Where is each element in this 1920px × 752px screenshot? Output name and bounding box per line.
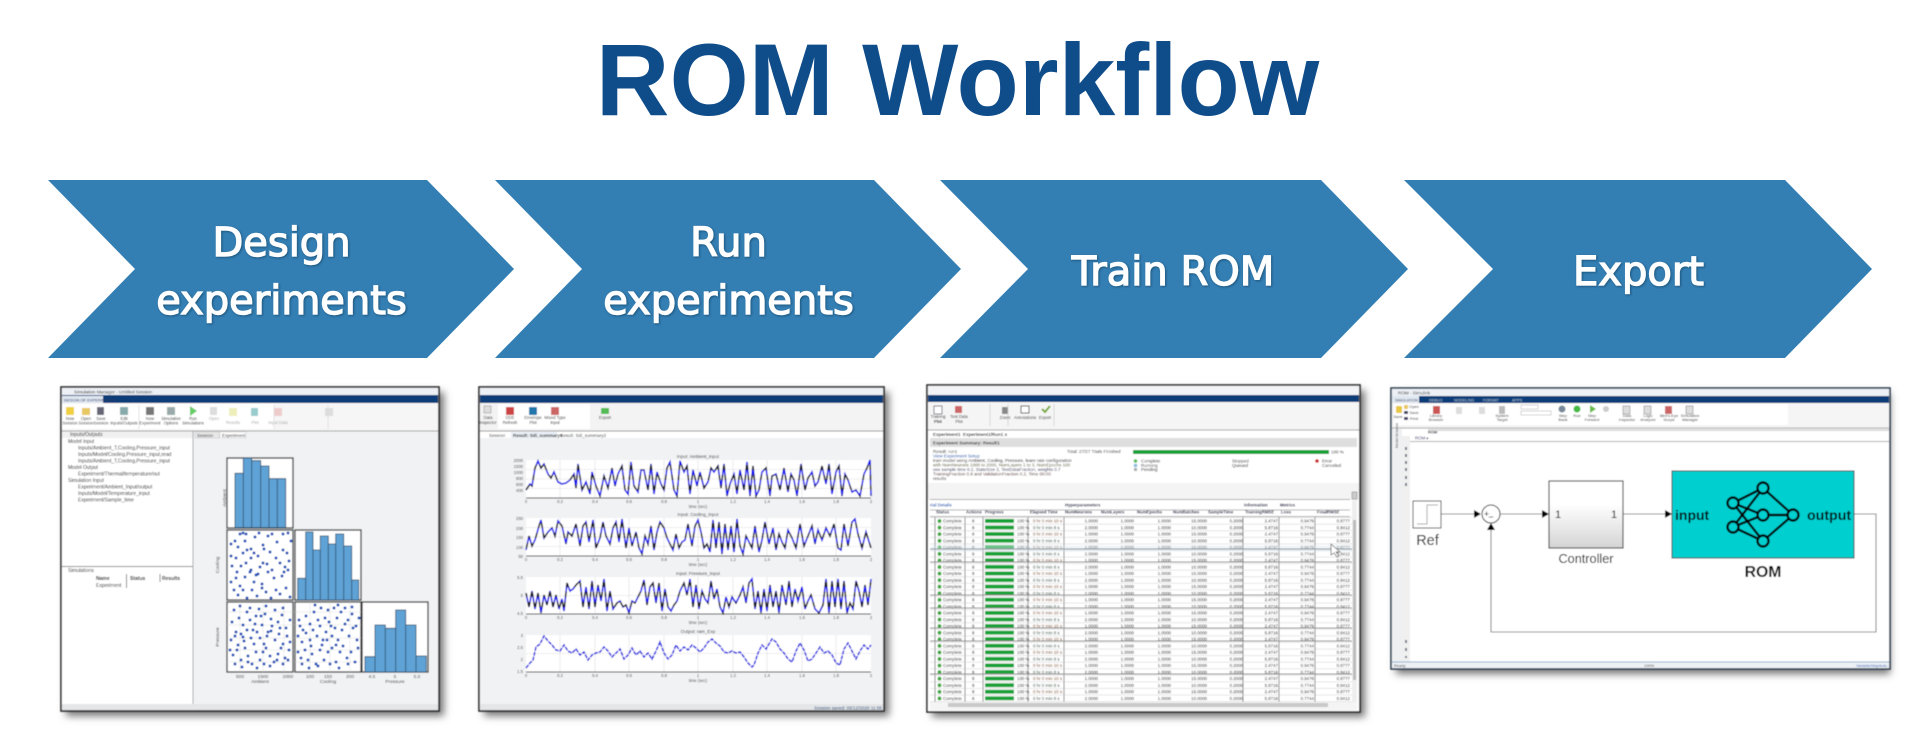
line chart: cooling input: 1.2: [730, 557, 737, 562]
line chart: output: 1.4: [764, 673, 771, 678]
line chart: output: [517, 629, 873, 683]
axis labels: Cooling: [215, 557, 221, 573]
line chart: output: 1.5: [517, 669, 524, 674]
ribbon icons: Plot: [529, 420, 537, 425]
trials table: Metrics: [1280, 502, 1296, 508]
line chart: ambient input: 2: [870, 499, 873, 504]
panel: export Simulink screenshot: APPS: [1512, 398, 1523, 402]
ribbon icons: Back: [1559, 417, 1567, 422]
tree of inputs and outputs: Simulation Input: [68, 478, 104, 484]
block: Ref step source: [1413, 501, 1441, 549]
panel: train ROM screenshot: Experiment Summary: Result1: [933, 440, 1000, 446]
signal wires: [1441, 514, 1876, 632]
axis labels: Pressure: [385, 679, 405, 685]
panel: design experiments screenshot: [61, 387, 444, 716]
ribbon icons: New: [146, 416, 155, 421]
line chart: output: 2: [521, 657, 524, 662]
line chart: ambient input: 0: [525, 499, 528, 504]
line chart: output: time (sec): [689, 678, 708, 683]
ribbon icons: Open: [81, 416, 92, 421]
line chart: ambient input: 0.2: [557, 499, 564, 504]
line chart: cooling input: time (sec): [689, 562, 708, 567]
ribbon icons: Save: [1409, 410, 1419, 415]
scatter points: [231, 533, 291, 598]
line chart: pressure input: 5: [521, 593, 524, 598]
line chart: cooling input: 1.4: [764, 557, 771, 562]
line chart: cooling input: 1: [697, 557, 700, 562]
line chart: ambient input: 800: [516, 476, 524, 481]
line chart: pressure input: 1.6: [799, 615, 806, 620]
panel: export Simulink screenshot: VariableStepAuto: [1856, 663, 1888, 668]
block: sum: +: [1484, 509, 1489, 519]
axis labels: 150: [324, 674, 332, 680]
line chart: ambient input: 0.4: [592, 499, 599, 504]
block: ROM neural network: output: [1807, 508, 1851, 524]
line chart: pressure input: 0.6: [626, 615, 633, 620]
tree of inputs and outputs: Model Output: [68, 465, 99, 471]
trials table: Hyperparameters: [1065, 502, 1101, 508]
line chart: ambient input: 1.2: [730, 499, 737, 504]
ribbon icons: Plot: [934, 419, 943, 424]
ribbon icons: Refresh: [503, 420, 518, 425]
panel: run experiments screenshot: Session: [489, 433, 506, 438]
panel: export Simulink screenshot: MODELING: [1454, 398, 1474, 402]
line chart: pressure input: 1.2: [730, 615, 737, 620]
title: ROM Workflow: [596, 23, 1320, 137]
line chart: pressure input: 0.2: [557, 615, 564, 620]
ribbon icons: Data: [1623, 413, 1632, 418]
axis labels: 4.5: [369, 674, 376, 680]
panel: design experiments screenshot: DESIGN OF EXPERIMENTS: [64, 398, 116, 402]
line chart: pressure input: 1.8: [833, 615, 840, 620]
axis labels: Ambient: [222, 489, 228, 507]
tree of inputs and outputs: Experiment: [96, 583, 122, 589]
icon: mouse cursor: [1331, 544, 1340, 557]
ribbon icons: Training: [931, 414, 946, 419]
ribbon icons: [931, 406, 1052, 424]
line chart: pressure input: 4.5: [517, 611, 524, 616]
experiment summary: results: [933, 476, 947, 481]
experiment summary: 100 %: [1331, 450, 1344, 454]
line chart: cooling input: 0.6: [626, 557, 633, 562]
histogram: ambient: [235, 458, 286, 528]
trials table: Information: [1244, 502, 1268, 508]
ribbon icons: Results: [226, 420, 240, 425]
experiment summary: Stopped: [1232, 458, 1249, 464]
trials table: Loss: [1281, 510, 1292, 514]
line chart: cooling input: 150: [516, 535, 524, 540]
ribbon icons: Browser: [1429, 417, 1444, 422]
block: sum: [1474, 505, 1500, 530]
chevron: export: Export: [1573, 249, 1704, 295]
panel: run experiments screenshot: Session saved: 05/12/2020 11:55: [814, 706, 882, 710]
trials table: rial Details: [930, 502, 952, 508]
line chart: cooling input: 0.8: [661, 557, 668, 562]
line chart: ambient input: 1.8: [833, 499, 840, 504]
experiment summary: use sample time 0.2, StateSize 3, TestDataFraction, weights 0.7: [933, 467, 1061, 472]
ribbon icons: Target: [1496, 417, 1508, 422]
axis labels: 5.5: [414, 674, 421, 680]
tree of inputs and outputs: Experiment/Sample_time: [78, 498, 134, 504]
chevron: train ROM: Train ROM: [1071, 249, 1274, 295]
chevron: run experiments: [495, 180, 961, 358]
axis labels: 5: [394, 674, 397, 680]
chevron: design experiments: Design: [212, 220, 351, 266]
ribbon icons: Envelope: [524, 415, 542, 420]
ribbon icons: Run: [1573, 413, 1581, 418]
ribbon icons: Open: [1409, 404, 1419, 409]
line chart: ambient input: 600: [516, 482, 524, 487]
histogram: pressure: [365, 610, 426, 672]
line chart: cooling input: 0: [525, 557, 528, 562]
chevron: run experiments: Run: [690, 220, 767, 266]
panel: export Simulink screenshot: SIMULATION: [1395, 398, 1418, 402]
trials table: NumLayers: [1101, 510, 1125, 514]
line chart: pressure input: Input: Pressure_Input: [676, 571, 721, 576]
tree of inputs and outputs: Inputs/Model/Temperature_input: [78, 491, 150, 497]
ribbon icons: Forward: [1585, 417, 1599, 422]
ribbon icons: [63, 406, 333, 426]
tree of inputs and outputs: Inputs/Ambient_T,Cooling,Pressure_input: [78, 446, 171, 452]
trials table: Status: [936, 510, 950, 514]
trials table: Actions: [966, 510, 982, 514]
line chart: output: 3: [521, 633, 524, 638]
trials table: NumNeurons: [1065, 510, 1093, 514]
line chart: pressure input: 1.4: [764, 615, 771, 620]
experiment summary: Error: [1322, 458, 1333, 464]
ribbon icons: Mixed Type: [544, 415, 566, 420]
line chart: ambient input: 1.6: [799, 499, 806, 504]
tree of inputs and outputs: Status: [130, 576, 146, 582]
ribbon icons: Zoom: [1000, 415, 1011, 420]
ribbon icons: Analyzer: [1640, 417, 1656, 422]
block: controller: 1: [1555, 509, 1561, 521]
chevron: design experiments: experiments: [156, 278, 407, 324]
panel: export Simulink screenshot: 100%: [1644, 663, 1655, 668]
panel: run experiments screenshot: [479, 387, 889, 716]
line chart: cooling input: 0.2: [557, 557, 564, 562]
tree of inputs and outputs: Model Input: [68, 439, 95, 445]
line chart: output: 0.8: [661, 673, 668, 678]
ribbon icons: Session: [79, 420, 94, 426]
line chart: pressure input: 2: [870, 615, 873, 620]
line chart: ambient input: 2000: [514, 458, 524, 463]
experiment summary: [933, 449, 1344, 481]
tree of inputs and outputs: Experiment/Thermal/temperature/out: [78, 472, 160, 478]
tree of inputs and outputs: [68, 432, 180, 589]
panel: design experiments screenshot: Experiment: [222, 433, 246, 438]
tree of inputs and outputs: Experiment/Ambient_Input/output: [78, 484, 153, 490]
ribbon icons: Plot: [251, 420, 259, 425]
axis labels: 1500: [258, 674, 269, 680]
ribbon icons: Manager: [1682, 417, 1699, 422]
ribbon icons: Input: [550, 420, 560, 425]
chevron: export: [1404, 180, 1872, 358]
line chart: cooling input: 100: [516, 545, 524, 550]
line chart: pressure input: 0.4: [592, 615, 599, 620]
panel: export Simulink screenshot: DEBUG: [1429, 398, 1443, 402]
ribbon icons: Options: [164, 420, 178, 426]
line chart: cooling input: [516, 512, 873, 567]
trials table: [930, 500, 1352, 702]
line chart: output: 1: [697, 673, 700, 678]
tree of inputs and outputs: Inputs/Model/Cooling,Pressure_input,read: [78, 452, 172, 458]
histogram: cooling: [298, 532, 359, 600]
panel: train ROM screenshot: [927, 385, 1365, 717]
panel: export Simulink screenshot: FORMAT: [1483, 398, 1499, 402]
axis labels: Pressure: [215, 627, 221, 647]
line chart: cooling input: 2: [870, 557, 873, 562]
ribbon icons: Export: [1039, 415, 1052, 420]
ribbon icons: Export: [599, 415, 612, 420]
panel: run experiments screenshot: Result: Sdi_summary1: [513, 433, 563, 438]
ribbon icons: Step: [1588, 413, 1597, 418]
line chart: output: 1.8: [833, 673, 840, 678]
ribbon icons: Session: [63, 420, 78, 426]
tree of inputs and outputs: Inputs/Outputs: [70, 432, 103, 438]
tree of inputs and outputs: Name: [96, 576, 110, 582]
ribbon icons: Test Data: [950, 414, 969, 419]
panel: export Simulink screenshot: [1391, 388, 1890, 674]
experiment summary: train model using Ambient, Cooling, Pressure, learn rate configuration: [933, 458, 1072, 463]
chevron: design experiments: [48, 180, 514, 358]
line chart: ambient input: time (sec): [689, 504, 708, 509]
line chart: cooling input: 1.6: [799, 557, 806, 562]
ribbon icons: Annotations: [1014, 415, 1036, 420]
line chart: output: 1.2: [730, 673, 737, 678]
ribbon icons: Input Data: [268, 420, 288, 425]
line chart: ambient input: 1: [697, 499, 700, 504]
trials table: Elapsed Time: [1030, 510, 1058, 514]
line chart: ambient input: 1500: [514, 464, 524, 469]
block: controller: [1542, 481, 1623, 566]
ribbon icons: Scope: [1663, 417, 1675, 422]
chevron: train ROM: [940, 180, 1408, 358]
experiment summary: Queued: [1232, 463, 1249, 468]
axis labels: 500: [236, 674, 244, 680]
panel: export Simulink screenshot: Ready: [1394, 663, 1406, 668]
axis labels: 200: [346, 674, 354, 680]
axis labels: Cooling: [320, 679, 336, 685]
experiment summary: Total: 27/27 Trials Finished: [1067, 449, 1121, 454]
panel: train ROM screenshot: Experiment1: [933, 432, 961, 437]
line chart: pressure input: time (sec): [689, 620, 708, 625]
ribbon icons: Save: [1393, 414, 1403, 419]
axis labels: Ambient: [251, 679, 269, 685]
ribbon icons: Library: [1430, 413, 1442, 418]
ribbon icons: System: [1495, 413, 1509, 418]
line chart: pressure input: 1: [697, 615, 700, 620]
panel: export Simulink screenshot: ROM ▸: [1415, 436, 1429, 440]
chevron: run experiments: experiments: [603, 278, 854, 324]
axis labels: 100: [306, 674, 314, 680]
panel: export Simulink screenshot: ROM: [1428, 430, 1438, 434]
experiment summary: Result: run1: [933, 449, 958, 454]
panel: train ROM screenshot: Experiment1/Run1 x: [963, 432, 1008, 437]
ribbon icons: Step: [1559, 413, 1568, 418]
line chart: output: 2: [870, 673, 873, 678]
ribbon icons: Inspector: [1619, 417, 1636, 422]
ribbon icons: [479, 406, 612, 425]
ribbon icons: Logic: [1643, 413, 1653, 418]
block: ROM neural network: input: [1675, 507, 1710, 523]
ribbon icons: Save: [96, 416, 106, 421]
experiment summary: with NumNeurons 1000 to 2000, NumLayers 1 to 3, NumEpochs 100: [933, 462, 1071, 468]
trials table: NumEpochs: [1137, 510, 1163, 514]
line chart: output: 0.4: [592, 673, 599, 678]
line chart: cooling input: 1.8: [833, 557, 840, 562]
line chart: output: 2.5: [517, 645, 524, 650]
icon: neural network: [1728, 482, 1798, 546]
ribbon icons: Run: [189, 416, 198, 421]
ribbon icons: Open: [209, 416, 220, 421]
tree of inputs and outputs: Results: [162, 576, 180, 582]
line chart: pressure input: 0: [525, 615, 528, 620]
line chart: ambient input: 1.4: [764, 499, 771, 504]
line chart: ambient input: Input: Ambient_Input: [677, 454, 720, 459]
tree of inputs and outputs: Simulations: [68, 568, 94, 574]
line chart: ambient input: 0.6: [626, 499, 633, 504]
ribbon icons: Edit: [120, 416, 128, 421]
ribbon icons: Plot: [955, 419, 963, 424]
panel: design experiments screenshot: Session: [197, 433, 214, 438]
ribbon icons: Simulation: [1681, 413, 1699, 418]
line chart: output: Output: ram_Exp: [681, 629, 716, 634]
line chart: ambient input: [514, 454, 873, 509]
experiment summary: Canceled: [1322, 463, 1342, 468]
block: sum: −: [1488, 512, 1494, 522]
panel: design experiments screenshot: Simulation Manager - Untitled Session: [74, 390, 153, 394]
ribbon icons: Simulations: [182, 420, 204, 426]
panel: export Simulink screenshot: ROM - Simulink: [1398, 390, 1431, 396]
line chart: cooling input: Input: Cooling_Input: [677, 512, 719, 517]
line chart: output: 0: [525, 673, 528, 678]
panel: run experiments screenshot: Result: Sdi_summary2: [560, 433, 607, 438]
axis labels: [215, 489, 421, 685]
ribbon icons: Bird's-Eye: [1660, 413, 1679, 418]
ribbon icons: DDE: [506, 415, 515, 420]
line chart: output: 0.6: [626, 673, 633, 678]
block: controller: Controller: [1558, 552, 1614, 566]
experiment summary: TrainingFraction 0.8 and ValidationFraction 0.2, Time 00:00: [933, 472, 1051, 476]
trials table: Progress: [985, 510, 1004, 514]
line chart: ambient input: 1000: [514, 470, 524, 475]
block: ROM neural network: ROM: [1745, 564, 1781, 581]
block: ROM neural network: [1665, 471, 1854, 581]
panel: export Simulink screenshot: Model Browser: [1395, 422, 1399, 448]
line chart: pressure input: 5.5: [517, 575, 524, 580]
line chart: pressure input: [517, 571, 873, 625]
ribbon icons: Inputs/Outputs: [110, 420, 138, 426]
scatter matrix plot: [215, 458, 428, 685]
trials table: SampleTime: [1208, 510, 1234, 514]
line chart: output: 0.2: [557, 673, 564, 678]
trials table: TrainingRMSE: [1245, 510, 1274, 514]
block: Ref step source: Ref: [1416, 533, 1440, 549]
line chart: cooling input: 200: [516, 526, 524, 531]
tree of inputs and outputs: Inputs/Ambient_T,Cooling,Pressure_input: [78, 458, 171, 464]
experiment summary: Complete: [1141, 458, 1161, 464]
axis labels: 2000: [283, 674, 294, 680]
ribbon icons: Session: [94, 420, 109, 426]
block: controller: 1: [1611, 509, 1617, 521]
ribbon icons: Inspector: [479, 420, 497, 425]
line chart: cooling input: 250: [516, 516, 524, 521]
experiment summary: Running: [1141, 463, 1158, 468]
trials table: FinalRMSE: [1317, 510, 1340, 514]
line chart: cooling input: 0.4: [592, 557, 599, 562]
line chart: output: 1.6: [799, 673, 806, 678]
experiment summary: Pending: [1141, 467, 1158, 472]
line chart: ambient input: 0.8: [661, 499, 668, 504]
line chart: ambient input: 400: [516, 488, 524, 493]
ribbon icons: Experiment: [139, 420, 161, 426]
trials table: NumBatches: [1173, 510, 1200, 514]
experiment summary: View Experiment Setup: [933, 454, 980, 458]
ribbon icons: Print: [1410, 416, 1419, 421]
line chart: pressure input: 0.8: [661, 615, 668, 620]
ribbon icons: Simulation: [161, 416, 181, 421]
ribbon icons: [1393, 404, 1699, 422]
ribbon icons: Data: [484, 415, 493, 420]
line chart: cooling input: 50: [518, 554, 524, 559]
ribbon icons: New: [66, 416, 75, 421]
